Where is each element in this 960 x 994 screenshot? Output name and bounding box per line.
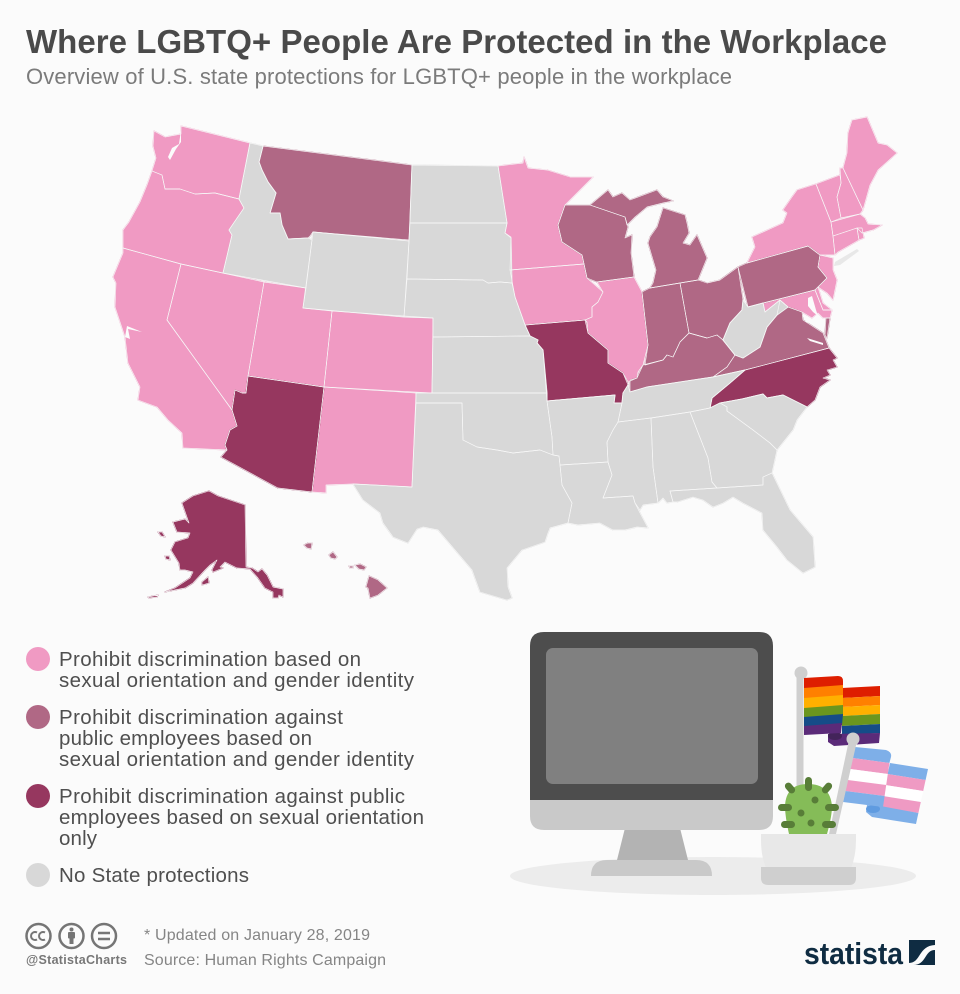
statista logo: statista (804, 936, 904, 971)
icon: flower pot (761, 834, 856, 885)
legend item: public employees, orientation only: employees based on sexual orientation (59, 806, 424, 829)
icon: attribution (60, 924, 84, 948)
legend item: public employees, orientation and identity: public employees based on (59, 727, 312, 750)
legend item: public employees, orientation and identity: Prohibit discrimination against (59, 706, 343, 729)
legend item: public employees, orientation only: only (59, 827, 98, 850)
legend item: no protections: No State protections (59, 864, 249, 887)
subtitle: Overview of U.S. state protections for LGBTQ+ people in the workplace (26, 64, 732, 89)
icon: monitor (530, 632, 773, 876)
icon: flag pole (829, 732, 860, 834)
licence icons (26, 924, 116, 948)
icon: creative commons (26, 924, 50, 948)
states protecting public employees, orientation only (148, 320, 837, 598)
illustration: desk with monitor, cactus and flags (510, 632, 928, 895)
map: U.S. states (113, 117, 897, 600)
legend item: full protections (26, 647, 415, 692)
statista handle: @StatistaCharts (26, 953, 127, 967)
legend item: full protections: sexual orientation and gender identity (59, 669, 415, 692)
desk shadow (510, 857, 916, 895)
legend item: public employees, orientation and identity (26, 705, 415, 771)
icon: no derivatives (92, 924, 116, 948)
legend (26, 647, 424, 887)
title: Where LGBTQ+ People Are Protected in the Workplace (26, 23, 887, 60)
icon: rainbow flag (794, 666, 880, 790)
states protecting public employees, orientation and identity (259, 146, 830, 598)
legend item: public employees, orientation only (26, 784, 424, 850)
source: Source: Human Rights Campaign (144, 952, 386, 969)
state fills (113, 117, 897, 600)
water and island details (125, 130, 859, 345)
update note: * Updated on January 28, 2019 (144, 927, 370, 944)
states with no protections (223, 143, 815, 600)
state border lines (113, 117, 897, 600)
icon: transgender flag (843, 747, 928, 824)
legend item: full protections: Prohibit discrimination based on (59, 648, 361, 671)
legend item: public employees, orientation and identity: sexual orientation and gender identity (59, 748, 415, 771)
legend item: public employees, orientation only: Prohibit discrimination against public (59, 785, 405, 808)
icon: cactus (778, 777, 839, 834)
states with full protections (113, 117, 897, 493)
